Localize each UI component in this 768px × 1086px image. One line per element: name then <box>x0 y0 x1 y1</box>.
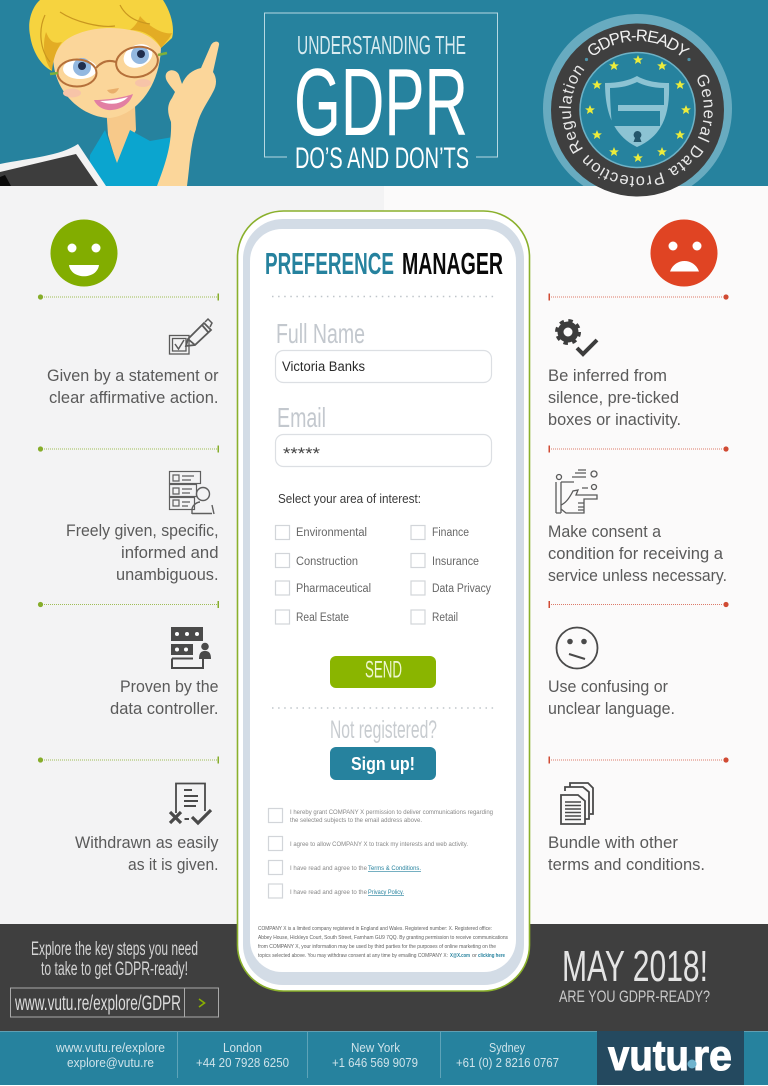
text: freely given: Freely given, specific, <box>66 522 218 540</box>
shield <box>605 76 669 147</box>
text: be inferred: Be inferred from <box>548 367 667 385</box>
email field <box>276 402 492 466</box>
badge: GDPR-ready seal <box>543 14 732 196</box>
footer contacts: London <box>223 1041 262 1055</box>
icon: checklist with person <box>170 472 214 514</box>
form heading: MANAGER <box>402 246 503 281</box>
consent checkboxes: Terms & Conditions. <box>368 865 421 872</box>
text: proven <box>110 678 218 718</box>
glasses <box>58 44 160 86</box>
consent checkboxes: I agree to allow COMPANY X to track my interests and web activity. <box>290 841 468 848</box>
arm and hand <box>157 42 219 186</box>
consent checkboxes: I have read and agree to the <box>290 865 367 872</box>
face <box>53 20 161 118</box>
title frame <box>264 13 498 157</box>
consent checkboxes: Privacy Policy. <box>368 889 404 896</box>
legal text: from COMPANY X, your information may be used by third parties for the purposes of online marketing on the <box>258 944 496 950</box>
icon: document with cross and check <box>170 784 211 823</box>
illustration: woman with book pointing <box>0 0 219 186</box>
text: bundle: Bundle with other <box>548 834 679 852</box>
interest checkboxes: Real Estate <box>296 612 349 624</box>
text: freely given: unambiguous. <box>116 566 218 584</box>
text: be inferred: boxes or inactivity. <box>548 411 681 429</box>
legal text: or <box>472 953 477 959</box>
page background <box>0 186 768 926</box>
footer bar <box>0 1031 768 1085</box>
legal text: clicking here <box>478 953 505 959</box>
footer contacts: New York <box>351 1041 401 1055</box>
email field: Email <box>277 402 326 433</box>
sign up button <box>330 747 436 780</box>
url box: www.vutu.re/explore/GDPR <box>14 992 181 1015</box>
may 2018 callout: ARE YOU GDPR-READY? <box>559 987 710 1006</box>
footer contacts: +61 (0) 2 8216 0767 <box>456 1056 559 1070</box>
interest checkboxes: Finance <box>432 527 469 539</box>
may 2018 callout <box>559 942 710 1006</box>
text: bundle <box>548 834 705 874</box>
send button <box>330 656 436 688</box>
text: freely given <box>66 522 218 584</box>
text: withdrawn <box>75 834 219 874</box>
footer contacts: +1 646 569 9079 <box>332 1056 418 1070</box>
interest checkboxes: Insurance <box>432 556 479 568</box>
footer contacts: explore@vutu.re <box>67 1056 154 1070</box>
text: be inferred <box>548 367 681 429</box>
nose and mouth <box>107 88 119 94</box>
text: proven: Proven by the <box>120 678 218 696</box>
text: bundle: terms and conditions. <box>548 856 705 874</box>
vuture logo <box>597 1031 744 1085</box>
text: given by a statement: clear affirmative action. <box>49 389 218 407</box>
legal text <box>258 926 508 959</box>
interest checkboxes: Pharmaceutical <box>296 583 371 595</box>
icon: confused face <box>556 628 598 668</box>
icon: hand pointing at options <box>556 470 597 513</box>
icon: bundled documents <box>561 783 593 824</box>
form heading: PREFERENCE <box>265 246 394 281</box>
text: withdrawn: Withdrawn as easily <box>75 834 219 852</box>
text: confusing language <box>548 678 675 718</box>
hair <box>29 0 173 71</box>
text: make consent <box>548 523 727 585</box>
explore text: Explore the key steps you need <box>31 939 198 960</box>
text: given by a statement: Given by a statement or <box>47 367 219 385</box>
consent checkboxes: the selected subjects to the email address above. <box>290 817 422 824</box>
explore text: to take to get GDPR-ready! <box>41 959 188 980</box>
dark call-to-action band <box>0 924 768 1031</box>
panel: preference manager phone form <box>238 211 530 991</box>
eyes <box>63 59 97 79</box>
full name field: Victoria Banks <box>282 359 365 374</box>
footer contacts <box>55 1041 559 1070</box>
text: be inferred: silence, pre-ticked <box>548 389 679 407</box>
interest checkboxes: Environmental <box>296 527 367 539</box>
legal text: X@X.com <box>450 953 470 959</box>
icon: server with person <box>171 627 211 668</box>
footer contacts: +44 20 7928 6250 <box>196 1056 289 1070</box>
text: freely given: informed and <box>121 544 218 562</box>
interest checkboxes: Construction <box>296 556 358 568</box>
legal text: COMPANY X is a limited company registered in England and Wales. Registered number: X. Registered office: <box>258 926 492 932</box>
text: make consent: Make consent a <box>548 523 662 541</box>
interest prompt: Select your area of interest: <box>278 492 421 506</box>
text: make consent: condition for receiving a <box>548 545 724 563</box>
full name field <box>276 318 492 382</box>
blouse <box>88 130 173 186</box>
text: given by a statement <box>47 367 219 407</box>
vuture logo: re <box>693 1032 732 1080</box>
send button: SEND <box>365 656 402 684</box>
sign up button: Sign up! <box>351 754 415 774</box>
icon: gear with check <box>556 320 597 354</box>
consent checkboxes: I have read and agree to the <box>290 889 367 896</box>
interest checkboxes <box>276 526 491 624</box>
explore text <box>31 939 198 980</box>
full name field: Full Name <box>276 318 365 349</box>
stars <box>585 55 691 162</box>
text: withdrawn: as it is given. <box>128 856 218 874</box>
book <box>0 144 106 186</box>
title: DO’S AND DON’TS <box>295 142 469 175</box>
url box <box>10 988 218 1017</box>
sad face icon <box>650 220 718 286</box>
footer contacts: Sydney <box>489 1041 526 1055</box>
title: GDPR <box>294 49 468 156</box>
badge: GDPR-ready seal: General Data Protection Regulation <box>559 66 713 187</box>
icon: checkbox and pen <box>170 319 212 354</box>
text: confusing language: unclear language. <box>548 700 675 718</box>
footer contacts: www.vutu.re/explore <box>55 1041 165 1055</box>
consent checkboxes <box>268 808 493 898</box>
red don'ts dividers <box>548 294 729 764</box>
email field: ***** <box>283 444 320 463</box>
legal text: Abbey House, Hickleys Court, South Street, Farnham GU9 7QQ. By granting permission to receive communications <box>258 935 508 941</box>
header banner <box>0 0 768 186</box>
vuture logo: vutu <box>608 1032 689 1080</box>
seal text: GDPR-READY <box>588 30 690 56</box>
green do's dividers <box>38 294 219 764</box>
text: make consent: service unless necessary. <box>548 567 727 585</box>
interest checkboxes: Retail <box>432 612 458 624</box>
text: proven: data controller. <box>110 700 218 718</box>
interest checkboxes: Data Privacy <box>432 583 491 595</box>
title <box>294 30 469 175</box>
text: confusing language: Use confusing or <box>548 678 668 696</box>
consent checkboxes: I hereby grant COMPANY X permission to deliver communications regarding <box>290 809 493 816</box>
happy face icon <box>50 220 118 286</box>
not registered prompt: Not registered? <box>330 716 437 744</box>
legal text: topics selected above. You may withdraw consent at any time by emailing COMPANY X: <box>258 953 448 959</box>
title: UNDERSTANDING THE <box>297 30 466 60</box>
